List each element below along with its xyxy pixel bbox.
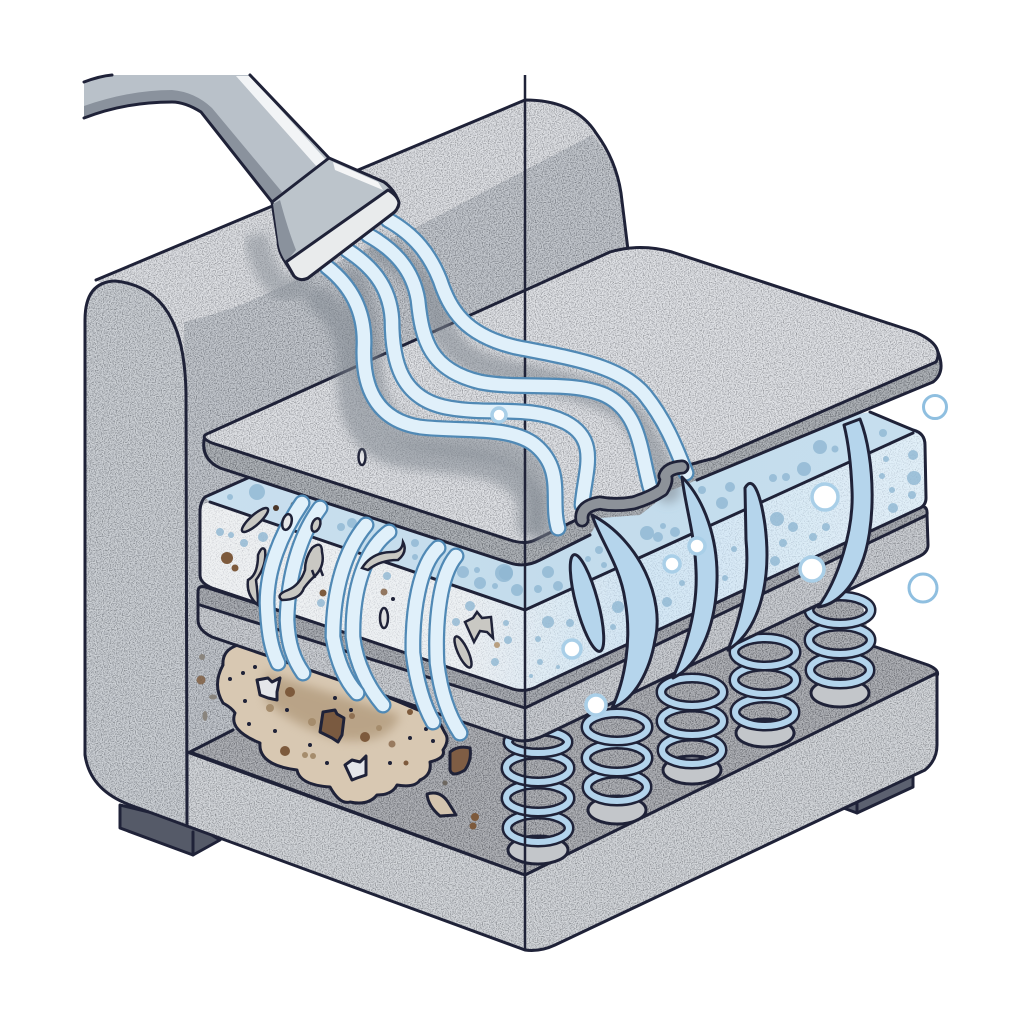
panel: floor of the sofa base bbox=[190, 590, 938, 875]
panel: backrest bbox=[96, 100, 628, 770]
water stream pair C through foam bbox=[413, 548, 460, 733]
water shadows bbox=[320, 250, 668, 530]
water band 1 bbox=[592, 515, 657, 708]
water stream 4 bbox=[327, 267, 558, 528]
cushion side band bbox=[204, 250, 941, 565]
panel: seat cushion bbox=[204, 248, 941, 565]
vertical cutaway line bbox=[524, 75, 526, 950]
inner wall shading bbox=[184, 135, 628, 770]
pipe bbox=[84, 75, 329, 202]
icon: right sofa foot bbox=[830, 763, 913, 813]
head highlight bbox=[333, 162, 383, 190]
water stream 2 bbox=[368, 235, 650, 487]
water droplet band 5 bbox=[563, 552, 611, 654]
vacuum nozzle bbox=[84, 75, 399, 280]
foam front face bbox=[200, 433, 926, 690]
pipe highlight bbox=[236, 76, 326, 168]
felt outlines bbox=[198, 507, 928, 741]
head bbox=[272, 158, 399, 280]
water stream 1 bbox=[388, 220, 686, 473]
bubbles bbox=[492, 396, 946, 715]
panel: lower felt layer bbox=[198, 507, 928, 741]
water band 2 bbox=[673, 477, 717, 678]
panel: front of the sofa base bbox=[187, 673, 937, 950]
small debris on cushion bbox=[358, 449, 366, 465]
pipe outline bbox=[84, 75, 329, 202]
water stream pair B through foam bbox=[333, 525, 389, 705]
head mouth lip bbox=[286, 190, 399, 280]
cushion torn flap bbox=[582, 467, 682, 520]
dark soil stain bbox=[265, 672, 400, 741]
water stream pair A through foam bbox=[267, 503, 320, 673]
backrest outline bbox=[96, 100, 628, 280]
soil specks bbox=[228, 665, 435, 766]
darker top band bbox=[198, 507, 927, 708]
foam pores bbox=[216, 429, 921, 678]
foam top face bbox=[205, 412, 921, 612]
spring 2 bbox=[586, 713, 648, 824]
loose dirt on the floor bbox=[196, 654, 479, 830]
spring 1 bbox=[506, 731, 570, 864]
trapped dirt particles bbox=[221, 502, 500, 670]
spring 4 bbox=[734, 638, 796, 747]
debris caught on the foam streams bbox=[280, 513, 405, 600]
spring 3 bbox=[661, 678, 723, 784]
icon: left sofa foot bbox=[120, 805, 220, 855]
dirt pile bbox=[218, 645, 447, 803]
water band 3 bbox=[728, 483, 767, 650]
panel: foam layer bbox=[200, 412, 926, 690]
water stream 3 bbox=[347, 250, 588, 505]
spring 5 bbox=[809, 596, 871, 707]
head shade bbox=[273, 200, 296, 262]
debris chips bbox=[257, 678, 280, 700]
nozzle shadow on backrest bbox=[255, 235, 310, 290]
cushion top surface bbox=[204, 248, 938, 542]
pipe underside shade bbox=[84, 90, 282, 202]
panel: left armrest bbox=[85, 281, 187, 826]
water band 4 bbox=[818, 419, 872, 607]
foam outline bbox=[200, 412, 926, 690]
